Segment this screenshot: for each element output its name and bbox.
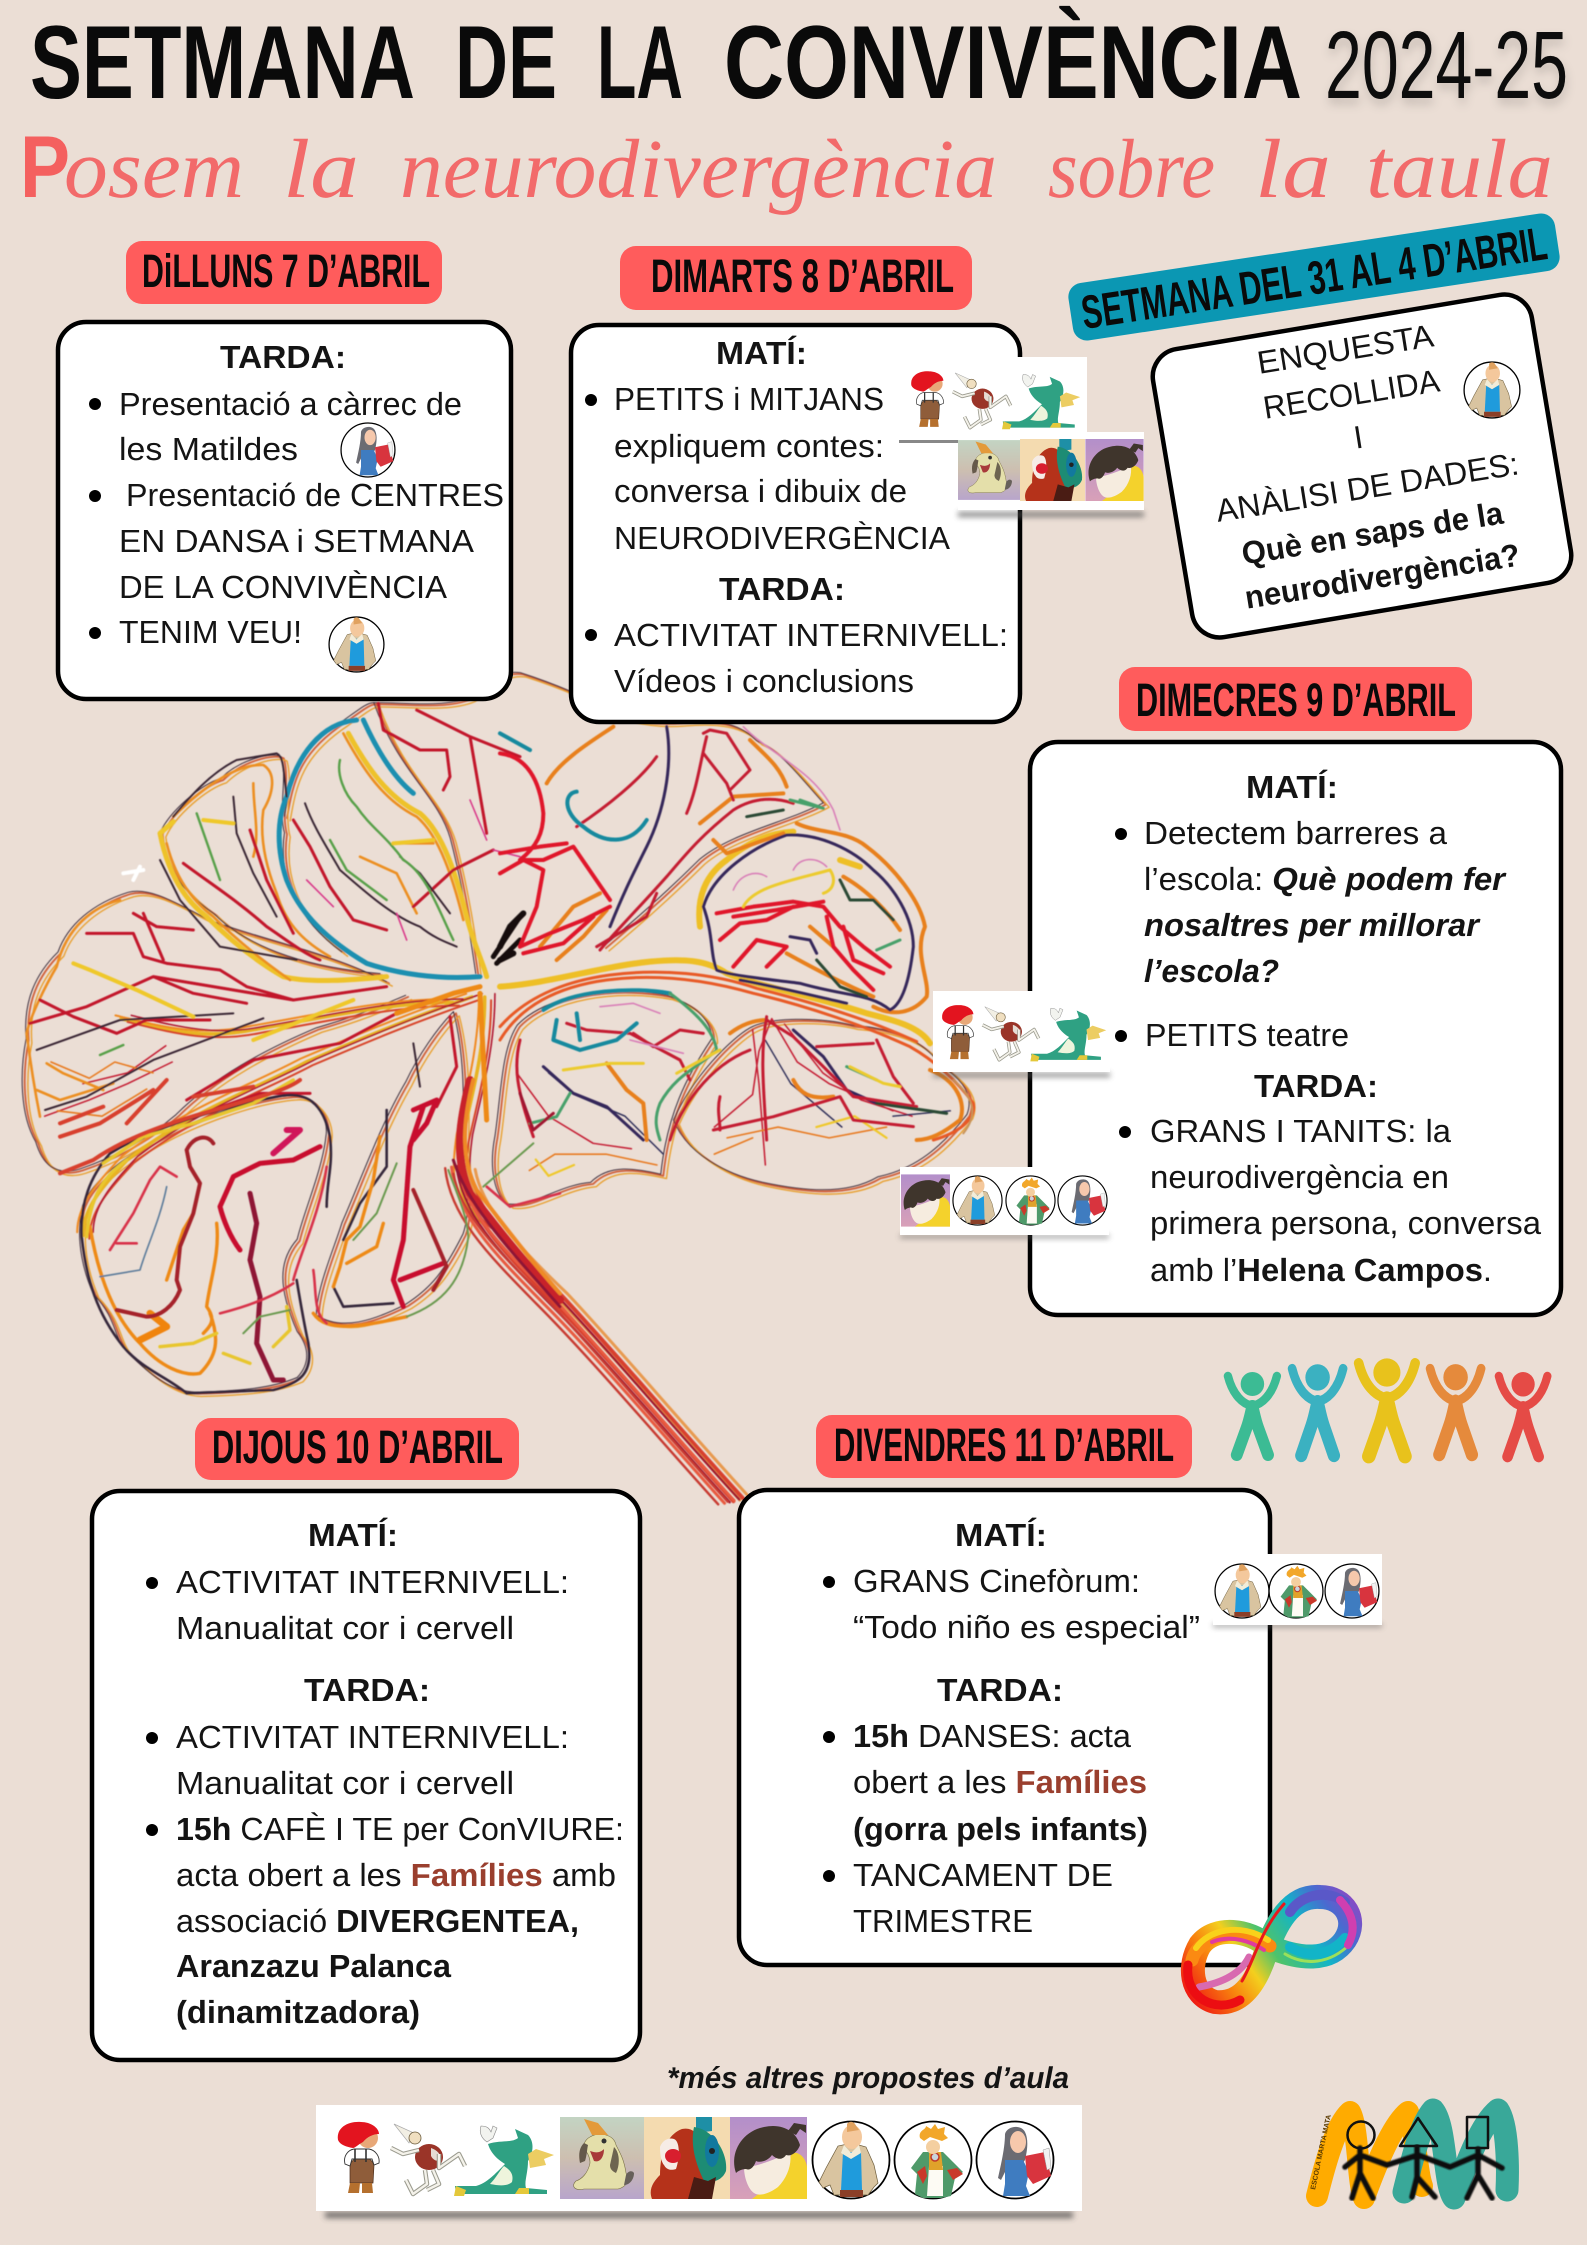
subtitle: sobre bbox=[1048, 123, 1215, 216]
panel: Dilluns: TENIM VEU! bbox=[119, 614, 302, 650]
panel: Dimecres: l’escola: Què podem fer bbox=[1144, 861, 1507, 897]
image strip: grans characters bbox=[1213, 1554, 1382, 1627]
panel: Dimecres: primera persona, conversa bbox=[1150, 1205, 1541, 1241]
panel: enquesta: Què en saps de la bbox=[1239, 495, 1506, 572]
label: Dimarts bbox=[620, 246, 972, 310]
panel: Dimarts: MATÍ: bbox=[716, 335, 807, 371]
panel: Divendres: MATÍ: bbox=[955, 1517, 1047, 1553]
panel: Divendres bbox=[739, 1490, 1270, 1965]
panel: Divendres: TANCAMENT DE bbox=[853, 1857, 1113, 1893]
logo: school: ESCOLA MARTA MATA bbox=[1310, 2114, 1333, 2190]
panel: Dimecres: neurodivergència en bbox=[1150, 1159, 1449, 1195]
panel: Dimecres bbox=[1030, 742, 1561, 1315]
panel: Dijous: ACTIVITAT INTERNIVELL: bbox=[176, 1564, 569, 1600]
subtitle: la bbox=[1255, 123, 1331, 216]
image strip: mitjans characters bbox=[958, 432, 1144, 517]
panel: Dilluns: Presentació a càrrec de bbox=[119, 386, 462, 422]
image strip: petits characters bbox=[899, 357, 1087, 443]
panel: Dimecres: nosaltres per millorar bbox=[1144, 907, 1481, 943]
image strip: all characters bbox=[316, 2105, 1082, 2218]
panel: Dimarts: NEURODIVERGÈNCIA bbox=[614, 520, 951, 556]
panel: Divendres: TARDA: bbox=[937, 1672, 1063, 1708]
icon: group of people bbox=[1228, 1358, 1547, 1457]
panel: Dimarts: conversa i dibuix de bbox=[614, 473, 907, 509]
panel: Dimecres: PETITS teatre bbox=[1145, 1017, 1349, 1053]
panel: Dimecres: MATÍ: bbox=[1246, 769, 1338, 805]
subtitle: neurodivergència bbox=[400, 123, 997, 216]
panel: enquesta: neurodivergència? bbox=[1242, 537, 1522, 616]
panel: Dilluns bbox=[58, 322, 511, 699]
label: Dilluns bbox=[126, 241, 442, 304]
icon: Matilda bbox=[341, 423, 395, 477]
panel: Dijous: (dinamitzadora) bbox=[176, 1994, 420, 2030]
panel: Divendres: TRIMESTRE bbox=[853, 1903, 1033, 1939]
title: DE bbox=[455, 5, 557, 121]
label: Dijous bbox=[195, 1418, 519, 1480]
panel: Dijous bbox=[92, 1491, 640, 2060]
panel: Dimarts bbox=[571, 325, 1020, 722]
panel: Divendres: GRANS Cinefòrum: bbox=[853, 1563, 1140, 1599]
label: Divendres: DIVENDRES 11 D’ABRIL bbox=[834, 1418, 1174, 1471]
panel: Dimarts: ACTIVITAT INTERNIVELL: bbox=[614, 617, 1008, 653]
panel: Dimarts: expliquem contes: bbox=[614, 428, 884, 464]
illustration: thread brain bbox=[22, 672, 975, 1504]
panel: Dijous: Aranzazu Palanca bbox=[176, 1948, 451, 1984]
panel: Dilluns: TARDA: bbox=[220, 339, 346, 375]
subtitle bbox=[20, 117, 1553, 216]
panel: enquesta bbox=[1149, 290, 1575, 642]
panel: enquesta: I bbox=[1351, 419, 1365, 456]
label: Dimarts: DIMARTS 8 D’ABRIL bbox=[651, 249, 954, 302]
icon: Tintin bbox=[1464, 362, 1520, 418]
panel: Dimecres: amb l’Helena Campos. bbox=[1150, 1252, 1492, 1288]
title: CONVIVÈNCIA bbox=[724, 5, 1302, 121]
panel: Dilluns: EN DANSA i SETMANA bbox=[119, 523, 475, 559]
panel: Divendres: (gorra pels infants) bbox=[853, 1811, 1148, 1847]
panel: Dilluns: DE LA CONVIVÈNCIA bbox=[119, 569, 448, 605]
panel: enquesta: ENQUESTA bbox=[1255, 317, 1437, 381]
panel: Dimecres: Detectem barreres a bbox=[1144, 815, 1447, 851]
panel: Dimarts: TARDA: bbox=[719, 571, 845, 607]
panel: Dimarts: PETITS i MITJANS bbox=[614, 381, 884, 417]
title bbox=[30, 5, 1302, 121]
panel: Dijous: Manualitat cor i cervell bbox=[176, 1610, 514, 1646]
note: other proposals: *més altres propostes d’aula bbox=[667, 2062, 1069, 2095]
panel: Dijous: MATÍ: bbox=[308, 1517, 398, 1553]
subtitle: P bbox=[20, 117, 70, 216]
panel: Dimarts: Vídeos i conclusions bbox=[614, 663, 914, 699]
panel: Dilluns: Presentació de CENTRES bbox=[126, 477, 504, 513]
label: Dilluns: DiLLUNS 7 D’ABRIL bbox=[142, 244, 430, 297]
panel: Dijous: acta obert a les Famílies amb bbox=[176, 1857, 616, 1893]
panel: Dijous: Manualitat cor i cervell bbox=[176, 1765, 514, 1801]
title: LA bbox=[597, 5, 683, 121]
label: Dimecres bbox=[1119, 667, 1472, 731]
panel: Dimecres: TARDA: bbox=[1254, 1068, 1378, 1104]
label: Divendres bbox=[816, 1415, 1192, 1478]
panel: Divendres: “Todo niño es especial” bbox=[853, 1609, 1200, 1645]
panel: Dilluns: les Matildes bbox=[119, 431, 298, 467]
panel: enquesta: RECOLLIDA bbox=[1261, 362, 1443, 426]
subtitle: la bbox=[283, 123, 359, 216]
panel: Dijous: ACTIVITAT INTERNIVELL: bbox=[176, 1719, 569, 1755]
panel: Dimecres: l’escola? bbox=[1144, 953, 1279, 989]
icon: rainbow infinity bbox=[1188, 1895, 1353, 2005]
panel: Dijous: TARDA: bbox=[304, 1672, 430, 1708]
panel: Divendres: obert a les Famílies bbox=[853, 1764, 1147, 1800]
subtitle: taula bbox=[1366, 123, 1553, 216]
label: Dijous: DIJOUS 10 D’ABRIL bbox=[212, 1420, 503, 1473]
panel: Dijous: associació DIVERGENTEA, bbox=[176, 1903, 579, 1939]
panel: Divendres: 15h DANSES: acta bbox=[853, 1718, 1131, 1754]
logo: school bbox=[1310, 2110, 1507, 2198]
image strip: petits characters bbox=[933, 991, 1110, 1077]
panel: enquesta: ANÀLISI DE DADES: bbox=[1213, 445, 1521, 529]
title: SETMANA bbox=[30, 5, 415, 121]
icon: Tintin bbox=[329, 617, 384, 672]
panel: Dimecres: GRANS I TANITS: la bbox=[1150, 1113, 1451, 1149]
subtitle: osem bbox=[64, 123, 244, 216]
image strip: grans characters bbox=[900, 1167, 1109, 1238]
panel: Dijous: 15h CAFÈ I TE per ConVIURE: bbox=[176, 1811, 624, 1847]
